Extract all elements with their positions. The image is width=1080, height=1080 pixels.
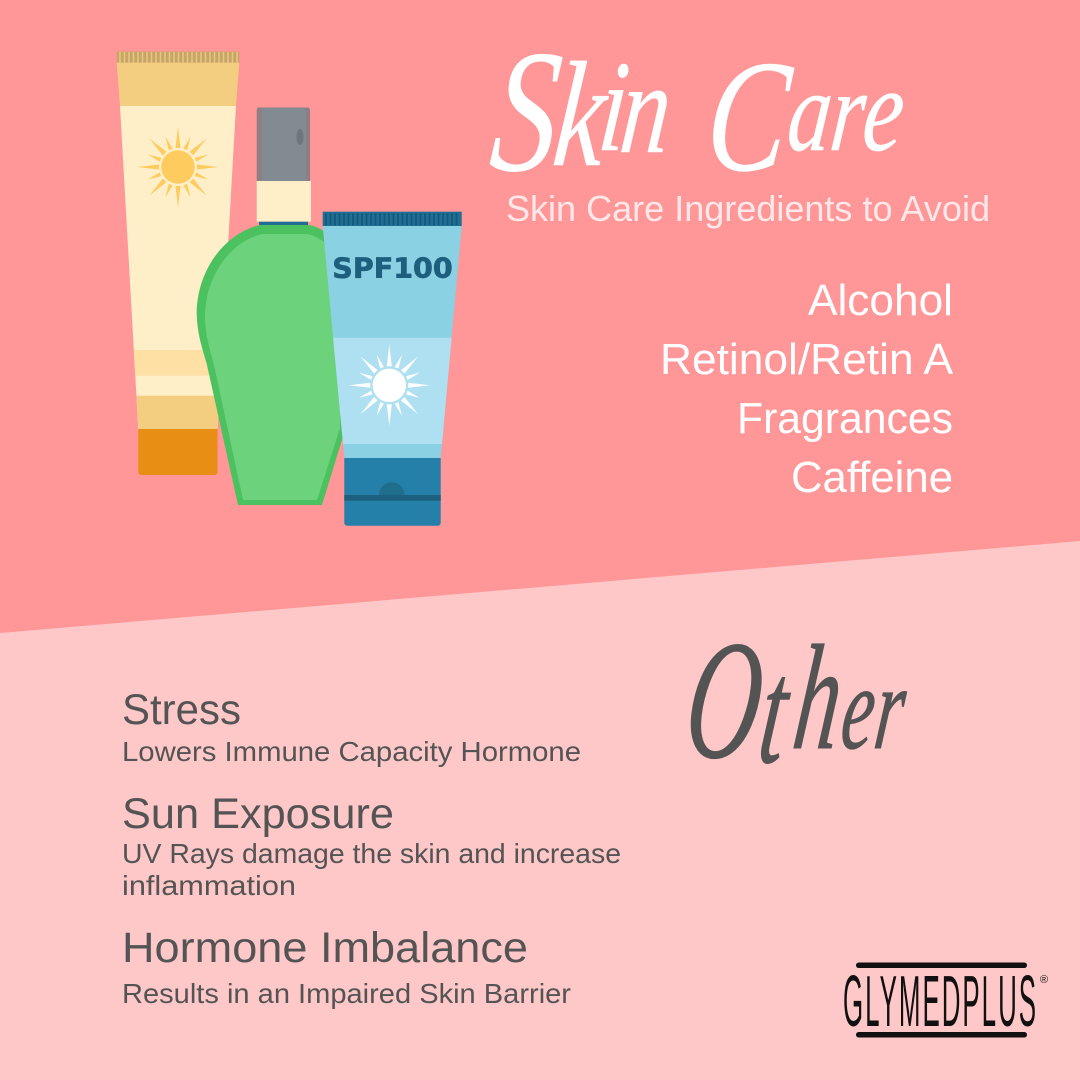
title: Skin Care: S: [484, 14, 569, 208]
icon: yellow sunscreen tube: [117, 52, 239, 475]
heading: Other: h: [787, 614, 852, 781]
text block: Stress: [122, 686, 581, 767]
title: Skin Care: r: [825, 49, 872, 176]
text block: Sun Exposure: [122, 790, 621, 901]
panel: bottom background: [0, 541, 1080, 1080]
title: Skin Care: a: [783, 49, 839, 176]
title: Skin Care: C: [700, 28, 798, 205]
text block: Hormone Imbalance: Hormone Imbalance: [122, 924, 528, 972]
heading: Other: O: [677, 606, 773, 794]
heading: Other: t: [752, 628, 799, 795]
heading: Other: r: [869, 641, 913, 775]
icon: yellow sun: [138, 126, 218, 208]
icon: blue SPF tube: [323, 212, 462, 526]
logo: GlyMed Plus: ®: [1040, 974, 1048, 986]
subtitle: Skin Care Ingredients to Avoid: [506, 188, 990, 229]
list: ingredients to avoid: Fragrances: [737, 394, 953, 443]
text block: Hormone Imbalance: [122, 924, 571, 1009]
title: Skin Care: k: [547, 31, 616, 198]
title: Skin Care: i: [593, 34, 635, 178]
text block: Sun Exposure: inflammation: [122, 870, 296, 901]
illustration: skin care products: [117, 52, 462, 526]
icon: green spray bottle: [197, 108, 345, 505]
heading: Other: e: [835, 641, 883, 775]
list: ingredients to avoid: Caffeine: [791, 453, 953, 502]
text block: Sun Exposure: UV Rays damage the skin and increase: [122, 838, 621, 869]
panel: top background: [0, 0, 1080, 640]
logo: GlyMed Plus: GLYMEDPLUS: [843, 962, 1038, 1042]
title: Skin Care: e: [858, 44, 911, 177]
list: ingredients to avoid: Alcohol: [808, 276, 953, 325]
label: SPF100: SPF100: [332, 251, 453, 284]
icon: white sun: [349, 345, 430, 426]
text block: Hormone Imbalance: Results in an Impaired Skin Barrier: [122, 978, 571, 1009]
title: Skin Care: n: [615, 36, 678, 180]
text block: Stress: Stress: [122, 686, 241, 734]
text block: Sun Exposure: Sun Exposure: [122, 790, 394, 838]
list: ingredients to avoid: Retinol/Retin A: [660, 335, 954, 384]
text block: Stress: Lowers Immune Capacity Hormone: [122, 736, 581, 767]
list: ingredients to avoid: [660, 276, 954, 502]
